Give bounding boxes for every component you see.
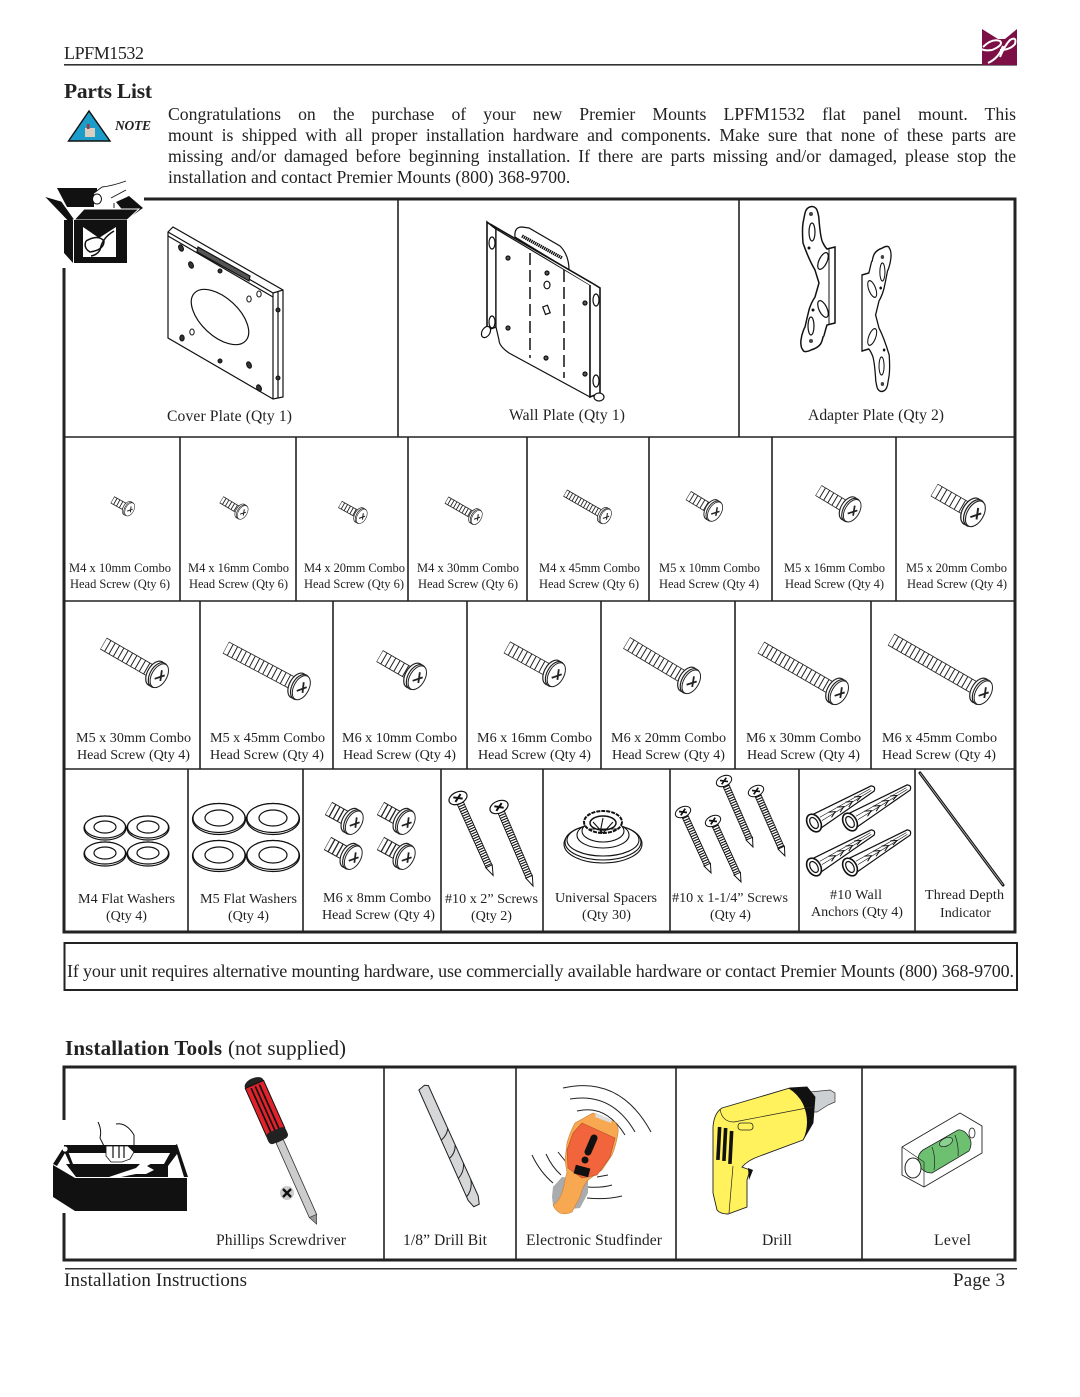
part: #10 x 2 inch screws	[445, 789, 542, 924]
part: M4 x 20mm	[304, 497, 405, 591]
part: M5 x 45mm	[210, 636, 325, 763]
caption: Adapter Plate (Qty 2)	[808, 407, 944, 424]
row: long screws	[76, 628, 997, 763]
part: M6 x 20mm: M6 x 20mm Combo	[611, 730, 726, 746]
part: M4 x 16mm: Head Screw (Qty 6)	[189, 577, 288, 591]
part: thread depth indicator	[920, 773, 1004, 921]
part: M6 x 16mm: Head Screw (Qty 4)	[478, 747, 591, 763]
part: M5 x 16mm	[784, 479, 885, 591]
part: M6 x 45mm	[882, 628, 997, 763]
part: M6 x 8mm screws: Head Screw (Qty 4)	[322, 907, 435, 923]
part: M5 x 16mm: Head Screw (Qty 4)	[785, 577, 884, 591]
heading: installation tools: (not supplied)	[228, 1036, 346, 1060]
tool: drill bit	[403, 1084, 488, 1249]
caption: Phillips Screwdriver	[216, 1232, 347, 1249]
tool: drill	[713, 1087, 835, 1249]
part: M6 x 45mm: M6 x 45mm Combo	[882, 730, 997, 746]
part: M4 x 30mm: Head Screw (Qty 6)	[418, 577, 518, 591]
part: M5 x 20mm: M5 x 20mm Combo	[906, 561, 1007, 575]
caption: 1/8” Drill Bit	[403, 1232, 488, 1249]
part: M5 x 10mm	[659, 486, 760, 591]
part: M5 x 10mm: Head Screw (Qty 4)	[659, 577, 759, 591]
part: M5 x 30mm	[76, 632, 191, 763]
part: M5 x 45mm: Head Screw (Qty 4)	[210, 747, 324, 763]
caption: Cover Plate (Qty 1)	[167, 408, 292, 425]
part: M6 x 10mm: Head Screw (Qty 4)	[343, 747, 456, 763]
part: M6 x 8mm screws	[321, 797, 435, 923]
part: #10 x 2 inch screws: (Qty 2)	[471, 908, 512, 924]
intro paragraph: mount is shipped with all proper installation hardware and components. Make sure that none of these parts are	[168, 125, 1016, 145]
part: M6 x 30mm	[746, 636, 861, 763]
icon: note triangle	[68, 111, 151, 141]
part: M6 x 10mm	[342, 644, 457, 763]
parts list frame	[64, 199, 1015, 932]
illustration: adapter plate left	[801, 207, 835, 352]
part: M6 x 10mm: M6 x 10mm Combo	[342, 730, 457, 746]
icon: phillips head	[280, 1186, 294, 1200]
header rule	[64, 64, 1017, 66]
part: M4 x 30mm	[417, 493, 519, 591]
part: M6 x 20mm: Head Screw (Qty 4)	[612, 747, 725, 763]
part: M4 flat washers: (Qty 4)	[106, 908, 147, 924]
part: M6 x 20mm	[611, 631, 726, 763]
tools frame	[64, 1067, 1015, 1260]
note label: NOTE	[114, 118, 151, 133]
row: washers, spacers, anchors	[78, 773, 1004, 924]
part: M4 x 20mm: M4 x 20mm Combo	[304, 561, 405, 575]
part: M5 flat washers: (Qty 4)	[228, 908, 269, 924]
intro paragraph	[168, 104, 1016, 187]
part: M5 x 20mm: Head Screw (Qty 4)	[907, 577, 1007, 591]
part: universal spacers	[555, 811, 657, 923]
callout: alternative hardware	[64, 943, 1017, 990]
part: M4 flat washers: M4 Flat Washers	[78, 891, 175, 907]
part: M5 x 20mm	[906, 477, 1007, 591]
part: #10 x 2 inch screws: #10 x 2” Screws	[445, 891, 538, 907]
part: M5 x 16mm: M5 x 16mm Combo	[784, 561, 885, 575]
tool: level	[902, 1113, 982, 1249]
part: M6 x 30mm: Head Screw (Qty 4)	[747, 747, 860, 763]
part: M6 x 30mm: M6 x 30mm Combo	[746, 730, 861, 746]
part: M5 x 45mm: M5 x 45mm Combo	[210, 730, 325, 746]
part: M4 x 45mm	[539, 486, 640, 591]
part: M4 flat washers	[78, 816, 175, 924]
tool: electronic studfinder	[526, 1086, 663, 1249]
footer: page number: Page 3	[953, 1270, 1005, 1291]
part: #10 wall anchors: #10 Wall	[830, 887, 882, 903]
intro paragraph: missing and/or damaged before beginning installation. If there are parts missing and/or damaged, please stop the	[168, 146, 1016, 166]
heading: installation tools: Installation Tools	[65, 1036, 222, 1060]
part: M6 x 16mm	[477, 636, 592, 763]
part: #10 x 1-1/4 inch screws	[672, 773, 792, 923]
panel: adapter plates	[801, 207, 944, 424]
panel: cover plate	[167, 227, 292, 425]
part: M5 flat washers	[192, 804, 300, 924]
part: thread depth indicator: Indicator	[940, 905, 991, 921]
illustration: adapter plate right	[862, 246, 891, 391]
row: small screws	[69, 477, 1007, 591]
footer: document name: Installation Instructions	[64, 1270, 247, 1291]
part: M4 x 45mm: M4 x 45mm Combo	[539, 561, 640, 575]
icon: premier mounts logo	[982, 29, 1017, 65]
heading: parts list: Parts List	[64, 79, 153, 103]
part: thread depth indicator: Thread Depth	[925, 887, 1004, 903]
part: M6 x 16mm: M6 x 16mm Combo	[477, 730, 592, 746]
part: M5 x 30mm: M5 x 30mm Combo	[76, 730, 191, 746]
part: M4 x 20mm: Head Screw (Qty 6)	[304, 577, 404, 591]
intro paragraph: Congratulations on the purchase of your new Premier Mounts LPFM1532 flat panel mount. This	[168, 104, 1016, 124]
part: M5 flat washers: M5 Flat Washers	[200, 891, 297, 907]
intro paragraph: installation and contact Premier Mounts (800) 368-9700.	[168, 167, 570, 187]
part: #10 x 1-1/4 inch screws: #10 x 1-1/4” Screws	[672, 890, 788, 906]
illustration: cover plate	[168, 227, 283, 399]
caption: Level	[934, 1232, 972, 1249]
part: #10 x 1-1/4 inch screws: (Qty 4)	[710, 907, 751, 923]
icon: open box	[47, 181, 143, 263]
tool: phillips screwdriver	[216, 1074, 347, 1249]
part: M5 x 30mm: Head Screw (Qty 4)	[77, 747, 190, 763]
part: M5 x 10mm: M5 x 10mm Combo	[659, 561, 760, 575]
footer rule	[65, 1268, 1017, 1270]
illustration: wall plate	[480, 222, 604, 401]
part: M4 x 10mm	[69, 493, 171, 591]
header: model number: LPFM1532	[64, 43, 144, 63]
part: M4 x 10mm: Head Screw (Qty 6)	[70, 577, 170, 591]
part: M4 x 30mm: M4 x 30mm Combo	[417, 561, 519, 575]
part: M4 x 45mm: Head Screw (Qty 6)	[539, 577, 639, 591]
part: M4 x 16mm: M4 x 16mm Combo	[188, 561, 289, 575]
panel: wall plate	[480, 222, 625, 424]
part: universal spacers: (Qty 30)	[582, 907, 631, 923]
callout: alternative hardware: If your unit requires alternative mounting hardware, use commercially available hardware or contact Premier Mounts (800) 368-9700.	[67, 961, 1014, 982]
caption: Wall Plate (Qty 1)	[509, 407, 625, 424]
icon: toolbox	[53, 1122, 188, 1211]
part: universal spacers: Universal Spacers	[555, 890, 657, 906]
part: M6 x 8mm screws: M6 x 8mm Combo	[323, 890, 431, 906]
caption: Drill	[762, 1232, 793, 1249]
part: M6 x 45mm: Head Screw (Qty 4)	[882, 747, 996, 763]
part: M4 x 16mm	[188, 493, 289, 591]
part: #10 wall anchors	[804, 778, 915, 920]
part: M4 x 10mm: M4 x 10mm Combo	[69, 561, 171, 575]
caption: Electronic Studfinder	[526, 1232, 663, 1249]
part: #10 wall anchors: Anchors (Qty 4)	[811, 904, 903, 920]
